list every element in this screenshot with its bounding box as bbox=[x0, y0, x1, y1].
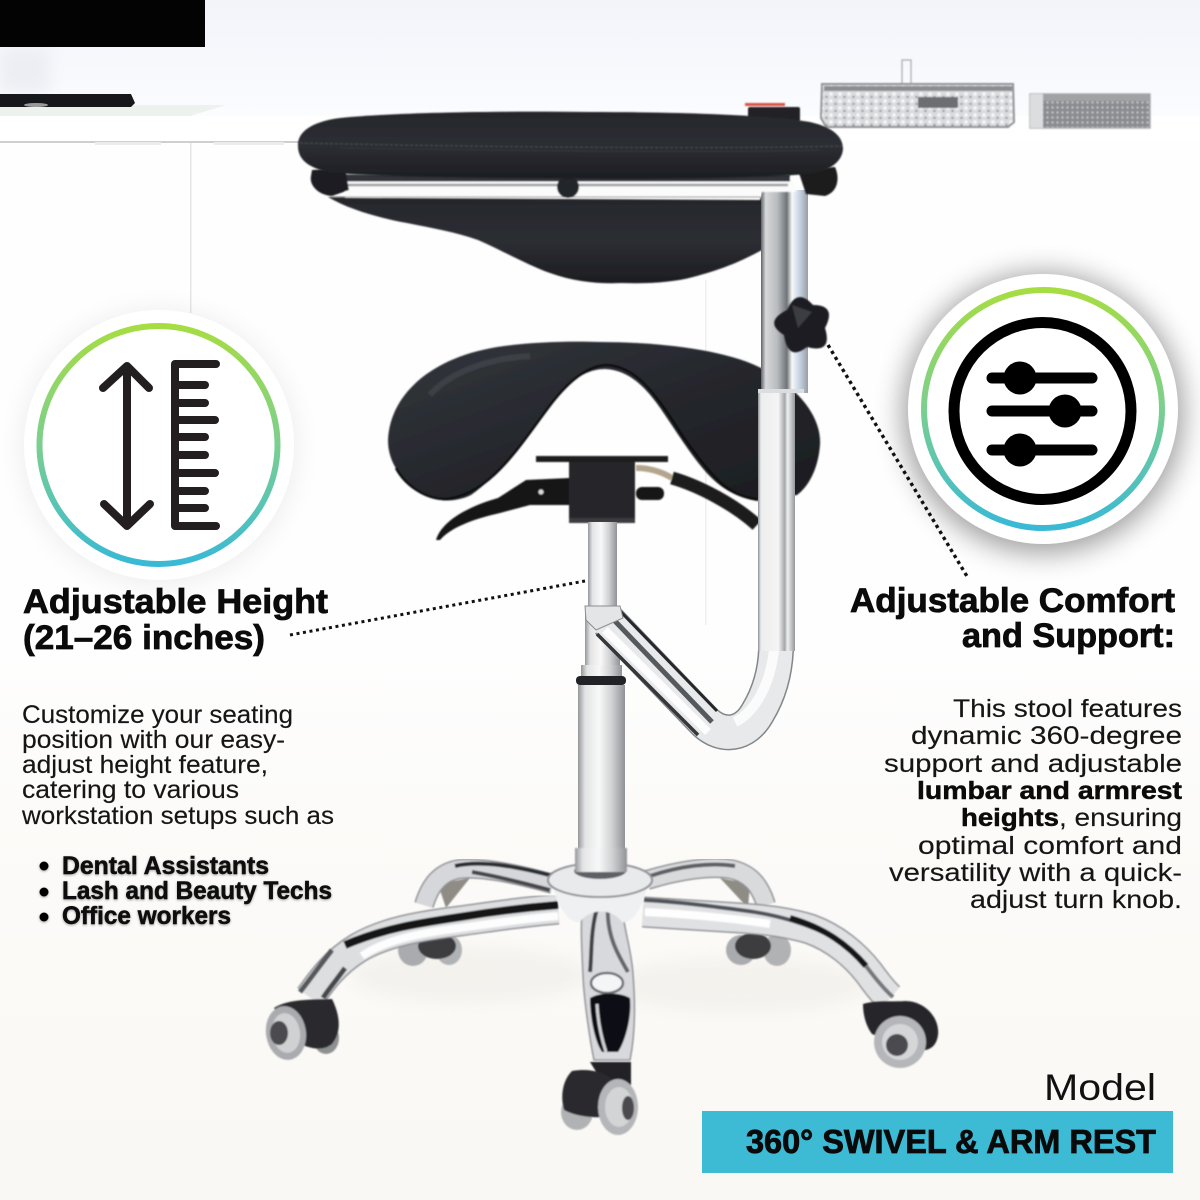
heading: adjustable comfort: Adjustable Comfort bbox=[850, 582, 1175, 620]
armrest pad underside bbox=[328, 197, 762, 283]
chrome brace and curved post bbox=[585, 190, 808, 735]
callout line: comfort bbox=[828, 345, 968, 578]
right base leg bbox=[643, 900, 893, 998]
text: height description bbox=[21, 701, 334, 830]
text: height description: adjust height feature, bbox=[22, 751, 268, 779]
list: workstation users: Office workers bbox=[62, 902, 231, 930]
text: comfort description: dynamic 360-degree bbox=[911, 722, 1182, 750]
callout line: height bbox=[290, 581, 585, 635]
heading: adjustable height bbox=[23, 583, 328, 657]
stool seat (saddle) bbox=[388, 342, 820, 501]
stool column bbox=[576, 522, 626, 870]
label: model: Model bbox=[1044, 1067, 1156, 1108]
list: workstation users bbox=[40, 852, 332, 930]
heading: adjustable height: (21–26 inches) bbox=[23, 619, 265, 657]
monitor on desk bbox=[0, 0, 226, 116]
text: comfort description: optimal comfort and bbox=[918, 832, 1182, 860]
banner: model name: 360° SWIVEL & ARM REST bbox=[746, 1123, 1156, 1160]
armrest pad top bbox=[298, 112, 843, 179]
icon: height adjustment bbox=[23, 310, 295, 583]
back base legs bbox=[424, 864, 766, 908]
text: comfort description bbox=[884, 695, 1183, 914]
right caster bbox=[863, 1001, 938, 1068]
text: height description: position with our easy- bbox=[22, 726, 285, 754]
text: comfort description: lumbar and armrest bbox=[917, 777, 1183, 805]
heading: adjustable height: Adjustable Height bbox=[23, 583, 328, 621]
left caster bbox=[262, 999, 339, 1063]
heading: adjustable comfort bbox=[850, 582, 1175, 655]
list: workstation users: Dental Assistants bbox=[62, 852, 269, 880]
text: comfort description: This stool features bbox=[953, 695, 1182, 723]
text: comfort description: support and adjustable bbox=[884, 750, 1182, 778]
heading: adjustable comfort: and Support: bbox=[962, 617, 1175, 655]
text: comfort description: heights bbox=[961, 804, 1059, 832]
text: height description: catering to various bbox=[22, 776, 239, 804]
text: comfort description: , ensuring bbox=[1059, 804, 1182, 832]
text: height description: workstation setups such as bbox=[21, 802, 334, 830]
adjustment knob bbox=[774, 297, 829, 352]
instrument trays on counter bbox=[745, 60, 1150, 128]
text: comfort description: adjust turn knob. bbox=[970, 886, 1182, 914]
seat mechanism and levers bbox=[436, 456, 757, 540]
text: height description: Customize your seating bbox=[22, 701, 293, 729]
front caster bbox=[561, 1062, 638, 1135]
front base leg and hub bbox=[548, 848, 652, 1060]
banner: model name bbox=[702, 1111, 1173, 1173]
icon: sliders adjustment bbox=[903, 273, 1183, 553]
text: comfort description: versatility with a quick- bbox=[889, 859, 1182, 887]
back caster wheels bbox=[398, 933, 791, 966]
list: workstation users: Lash and Beauty Techs bbox=[62, 877, 332, 905]
left base leg bbox=[300, 905, 558, 998]
chrome armrest rail bbox=[311, 167, 838, 200]
